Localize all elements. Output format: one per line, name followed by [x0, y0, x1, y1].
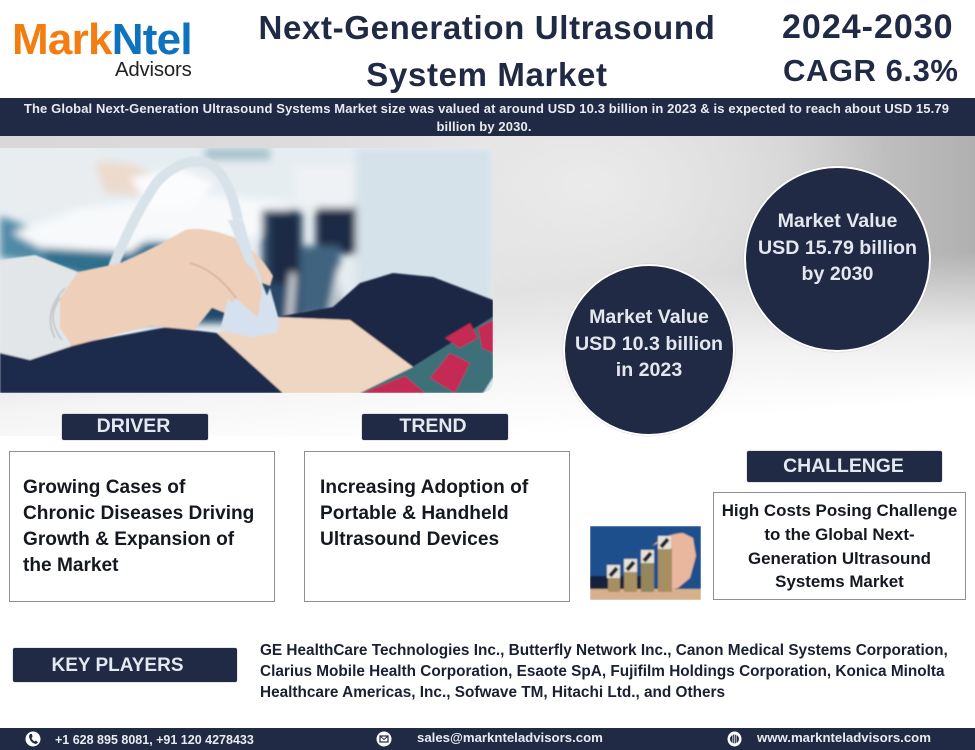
driver text box — [9, 451, 275, 602]
key players heading: KEY PLAYERS — [52, 655, 184, 676]
abdomen — [217, 317, 413, 393]
circle: market value 2023 — [563, 264, 735, 436]
probe — [220, 264, 279, 335]
sleeve — [0, 255, 78, 360]
title — [259, 9, 715, 93]
title: System Market — [366, 56, 608, 92]
trend text box: Ultrasound Devices — [320, 529, 499, 550]
website: www.marknteladvisors.com — [757, 730, 931, 745]
trend heading — [362, 414, 508, 440]
circle: market value 2030 — [744, 166, 931, 352]
icon: email — [376, 732, 392, 746]
challenge heading — [747, 451, 942, 482]
challenge text box: High Costs Posing Challenge — [722, 501, 957, 520]
title: Next-Generation Ultrasound — [259, 9, 715, 46]
challenge text box: Generation Ultrasound — [748, 549, 931, 568]
CAGR: CAGR 6.3% — [783, 53, 958, 88]
challenge text box: Systems Market — [775, 572, 904, 591]
logo wordmark: MarkNtel — [12, 15, 192, 64]
summary banner: billion by 2030. — [436, 119, 532, 134]
navy cloth — [0, 327, 283, 393]
background gradient — [0, 136, 975, 436]
circle: market value 2023: Market Value — [589, 306, 709, 328]
circle: market value 2030: USD 15.79 billion — [758, 236, 917, 258]
trend text box — [304, 451, 570, 602]
hand — [60, 229, 273, 346]
circle: market value 2030: Market Value — [778, 210, 897, 232]
phone numbers: +1 628 895 8081, +91 120 4278433 — [55, 733, 254, 747]
cable — [113, 161, 238, 267]
footer bar — [0, 728, 975, 750]
key players list: Clarius Mobile Health Corporation, Esaote SpA, Fujifilm Holdings Corporation, Konica Minolta — [260, 663, 945, 680]
challenge text box: to the Global Next- — [764, 525, 915, 544]
patterned garment — [360, 317, 493, 393]
logo — [12, 15, 192, 81]
challenge heading: CHALLENGE — [783, 455, 904, 477]
forecast period: 2024-2030 — [782, 8, 954, 46]
image: coins with arrows — [590, 526, 701, 600]
logo subtitle: Advisors — [115, 59, 192, 81]
key players heading — [13, 648, 237, 682]
email address: sales@marknteladvisors.com — [417, 730, 603, 745]
driver heading — [62, 414, 208, 440]
summary banner — [0, 98, 975, 136]
driver text box: the Market — [23, 555, 118, 576]
circle: market value 2023: in 2023 — [616, 359, 682, 381]
photo: ultrasound scan — [0, 148, 493, 393]
driver text box: Growth & Expansion of — [23, 529, 234, 550]
icon: phone — [26, 732, 40, 746]
key players list: Healthcare Americas, Inc., Sofwave TM, Hitachi Ltd., and Others — [260, 684, 725, 701]
key players list: GE HealthCare Technologies Inc., Butterfly Network Inc., Canon Medical Systems Corporation, — [260, 642, 948, 659]
driver text box: Chronic Diseases Driving — [23, 503, 254, 524]
waistband — [277, 273, 493, 367]
trend heading: TREND — [399, 415, 467, 437]
summary banner: The Global Next-Generation Ultrasound Systems Market size was valued at around USD 10.3 billion in 2023 & is expected to reach about USD 15.79 — [24, 101, 949, 116]
trend text box: Portable & Handheld — [320, 503, 509, 524]
driver text box: Growing Cases of — [23, 477, 185, 498]
circle: market value 2030: by 2030 — [802, 263, 873, 285]
forecast period and CAGR — [782, 8, 958, 88]
icon: globe — [728, 732, 742, 746]
key players list — [260, 642, 948, 701]
circle: market value 2023: USD 10.3 billion — [575, 332, 723, 354]
trend text box: Increasing Adoption of — [320, 477, 528, 498]
driver heading: DRIVER — [97, 415, 170, 437]
challenge text box — [713, 492, 966, 600]
